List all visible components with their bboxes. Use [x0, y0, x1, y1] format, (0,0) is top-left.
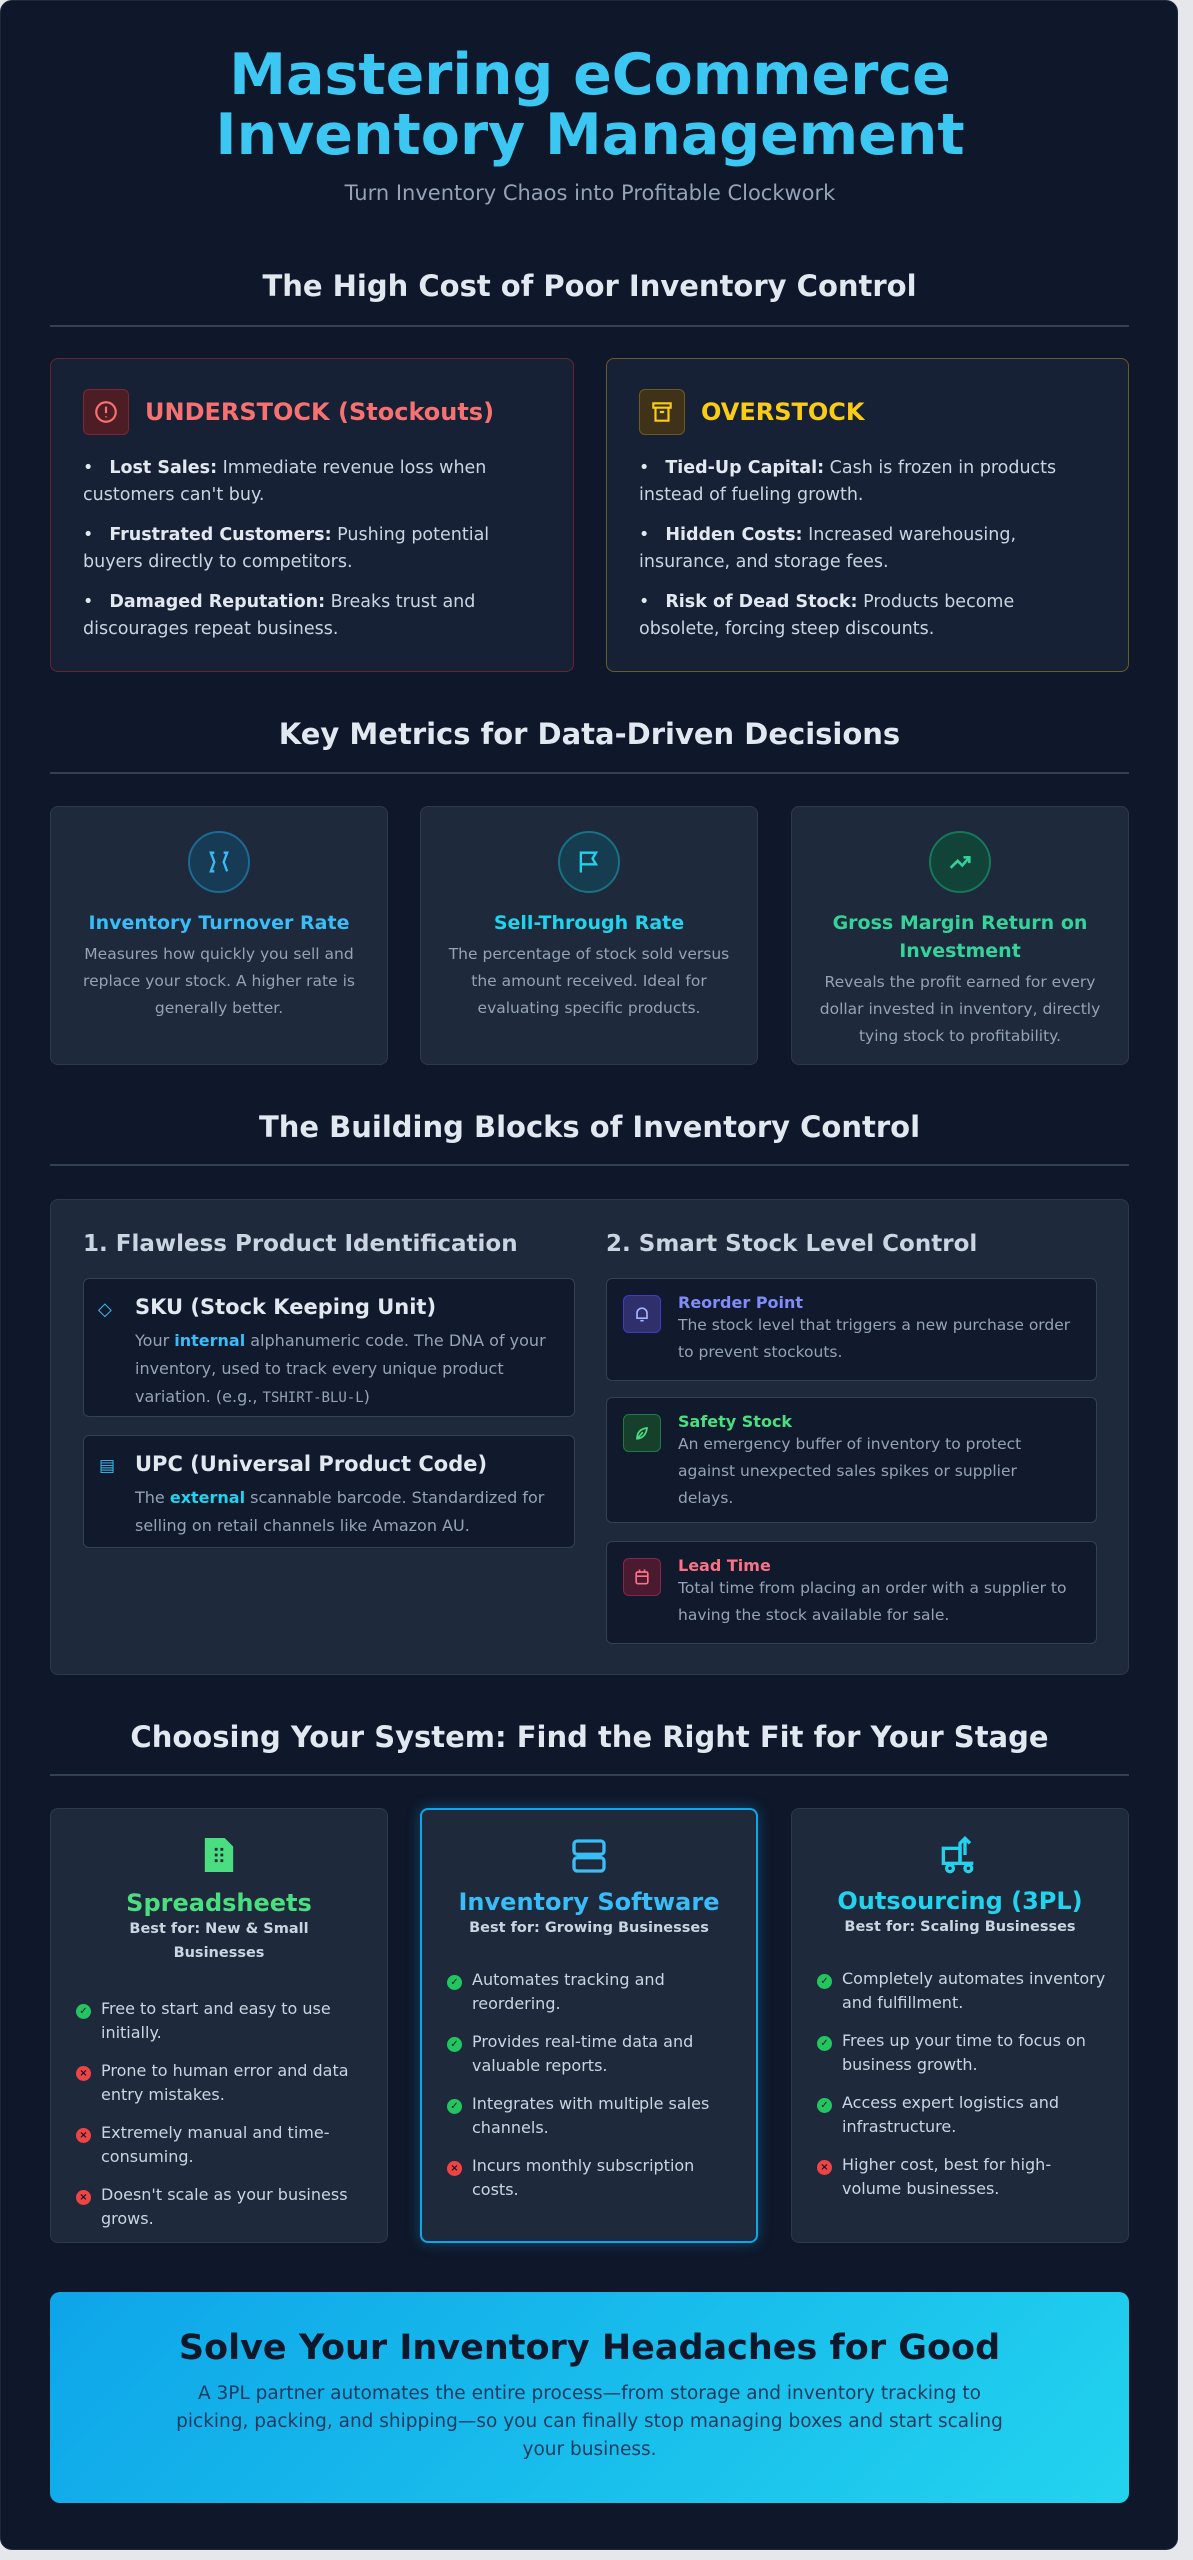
- icon: file: [204, 1838, 234, 1872]
- card: safety stock: An emergency buffer of inventory to protect against unexpected sales spikes or supplier delays.: [678, 1435, 1021, 1507]
- card: UPC: [83, 1435, 575, 1548]
- card: inventory software: ✓: [450, 2039, 459, 2050]
- card: spreadsheets: Best for: New & Small: [129, 1921, 309, 1937]
- card: outsourcing: ✓: [820, 1976, 829, 1987]
- card: safety stock: [606, 1397, 1097, 1523]
- card: UPC: ▤: [99, 1456, 115, 1476]
- heading: building blocks: The Building Blocks of Inventory Control: [259, 1110, 920, 1144]
- card: inventory software: ×: [450, 2163, 459, 2174]
- card: inventory software: Integrates with multiple sales channels.: [472, 2094, 709, 2137]
- card: outsourcing: Higher cost, best for high-volume businesses.: [842, 2155, 1051, 2198]
- card: safety stock: Safety Stock: [678, 1412, 792, 1431]
- icon: turnover: [188, 831, 250, 893]
- card: spreadsheets: Prone to human error and data entry mistakes.: [101, 2061, 349, 2104]
- card: outsourcing: Frees up your time to focus on business growth.: [842, 2031, 1086, 2074]
- icon: flag: [558, 831, 620, 893]
- card: SKU: Your internal alphanumeric code. The DNA of your inventory, used to track every unique product variation. (e.g., TSHIRT-BLU-L): [135, 1331, 546, 1406]
- panel: building blocks: [50, 1199, 1129, 1675]
- card: lead time: Total time from placing an order with a supplier to having the stock available for sale.: [678, 1579, 1066, 1624]
- heading: overstock: [639, 389, 866, 435]
- icon: dolly: [942, 1836, 974, 1874]
- card: inventory software: Best for: Growing Businesses: [469, 1920, 709, 1936]
- callout: CTA: [50, 2292, 1129, 2503]
- card: outsourcing: Best for: Scaling Businesses: [844, 1919, 1076, 1935]
- card: reorder point: [606, 1278, 1097, 1381]
- card: spreadsheets: ×: [79, 2192, 88, 2203]
- icon: trend: [929, 831, 991, 893]
- card: spreadsheets: Extremely manual and time-consuming.: [101, 2123, 329, 2166]
- list: overstock effects: Hidden Costs: Increased warehousing, insurance, and storage fees.: [639, 525, 1016, 572]
- panel: overstock: [606, 358, 1129, 672]
- card: SKU: SKU (Stock Keeping Unit): [135, 1295, 436, 1319]
- card: outsourcing: ✓: [820, 2100, 829, 2111]
- list: understock effects: Frustrated Customers: Pushing potential buyers directly to competitors.: [83, 525, 489, 572]
- heading: choosing system: Choosing Your System: Find the Right Fit for Your Stage: [130, 1720, 1049, 1754]
- card: reorder point: The stock level that triggers a new purchase order to prevent stockouts.: [678, 1316, 1070, 1361]
- card: outsourcing: Outsourcing (3PL): [837, 1887, 1083, 1915]
- card: GMROI: [791, 806, 1129, 1065]
- card: turnover: [50, 806, 388, 1065]
- list: overstock effects: Risk of Dead Stock: Products become obsolete, forcing steep discounts.: [639, 592, 1014, 639]
- card: GMROI: Reveals the profit earned for every dollar invested in inventory, directly tying stock to profitability.: [820, 973, 1100, 1045]
- card: sell-through: The percentage of stock sold versus the amount received. Ideal for evaluating specific products.: [449, 945, 729, 1017]
- card: spreadsheets: ×: [79, 2068, 88, 2079]
- card: spreadsheets: Businesses: [174, 1945, 264, 1961]
- heading: high cost: The High Cost of Poor Inventory Control: [262, 269, 917, 303]
- card: spreadsheets: Doesn't scale as your business grows.: [101, 2185, 348, 2228]
- list: overstock effects: Tied-Up Capital: Cash is frozen in products instead of fueling growth.: [639, 458, 1056, 505]
- heading: understock: [83, 389, 494, 435]
- card: lead time: Lead Time: [678, 1556, 771, 1575]
- subtitle: Turn Inventory Chaos into Profitable Clockwork: [345, 181, 835, 205]
- card: GMROI: Gross Margin Return on Investment: [833, 912, 1087, 962]
- list: understock effects: Damaged Reputation: Breaks trust and discourages repeat business.: [83, 592, 475, 639]
- card: outsourcing: ✓: [820, 2038, 829, 2049]
- card: spreadsheets: ×: [79, 2130, 88, 2141]
- card: spreadsheets: ✓: [79, 2006, 88, 2017]
- callout: CTA: Solve Your Inventory Headaches for Good: [179, 2328, 1000, 2368]
- card: inventory software: ✓: [450, 2101, 459, 2112]
- card: UPC: UPC (Universal Product Code): [135, 1452, 487, 1476]
- card: sell-through: [420, 806, 758, 1065]
- heading: key metrics: Key Metrics for Data-Driven Decisions: [279, 717, 900, 751]
- subheading: identification: 1. Flawless Product Identification: [83, 1231, 518, 1257]
- title: [215, 42, 965, 168]
- callout: CTA: A 3PL partner automates the entire process—from storage and inventory tracking to picking, packing, and shipping—so you can finally stop managing boxes and start scaling your business.: [176, 2383, 1003, 2460]
- title: Inventory Management: [215, 102, 965, 168]
- card: outsourcing: Access expert logistics and infrastructure.: [842, 2093, 1059, 2136]
- card: inventory software: ✓: [450, 1977, 459, 1988]
- panel: understock: [50, 358, 574, 672]
- card: sell-through: Sell-Through Rate: [494, 912, 684, 934]
- list: overstock effects: [639, 458, 1056, 639]
- card: turnover: Inventory Turnover Rate: [89, 912, 349, 934]
- card: spreadsheets: Spreadsheets: [126, 1889, 312, 1917]
- card: turnover: Measures how quickly you sell and replace your stock. A higher rate is generally better.: [83, 945, 355, 1017]
- card: inventory software: Inventory Software: [458, 1888, 720, 1916]
- title: Mastering eCommerce: [229, 42, 951, 108]
- heading: understock: UNDERSTOCK (Stockouts): [145, 398, 494, 426]
- card: spreadsheets: [50, 1808, 388, 2243]
- card: reorder point: Reorder Point: [678, 1293, 803, 1312]
- card: outsourcing: ×: [820, 2162, 829, 2173]
- card: lead time: [606, 1541, 1097, 1644]
- list: understock effects: Lost Sales: Immediate revenue loss when customers can't buy.: [83, 458, 486, 505]
- card: SKU: ◇: [98, 1299, 112, 1320]
- card: SKU: [83, 1278, 575, 1417]
- card: inventory software: Incurs monthly subscription costs.: [472, 2156, 694, 2199]
- card: inventory software: [420, 1808, 758, 2243]
- icon: server: [572, 1839, 606, 1873]
- card: inventory software: Provides real-time data and valuable reports.: [472, 2032, 693, 2075]
- card: outsourcing: [791, 1808, 1129, 2243]
- card: spreadsheets: Free to start and easy to use initially.: [101, 1999, 331, 2042]
- card: outsourcing: Completely automates inventory and fulfillment.: [842, 1969, 1105, 2012]
- card: UPC: The external scannable barcode. Standardized for selling on retail channels like Amazon AU.: [135, 1488, 544, 1535]
- list: understock effects: [83, 458, 489, 639]
- subheading: stock level: 2. Smart Stock Level Control: [606, 1231, 977, 1257]
- heading: overstock: OVERSTOCK: [701, 398, 864, 426]
- card: inventory software: Automates tracking and reordering.: [472, 1970, 665, 2013]
